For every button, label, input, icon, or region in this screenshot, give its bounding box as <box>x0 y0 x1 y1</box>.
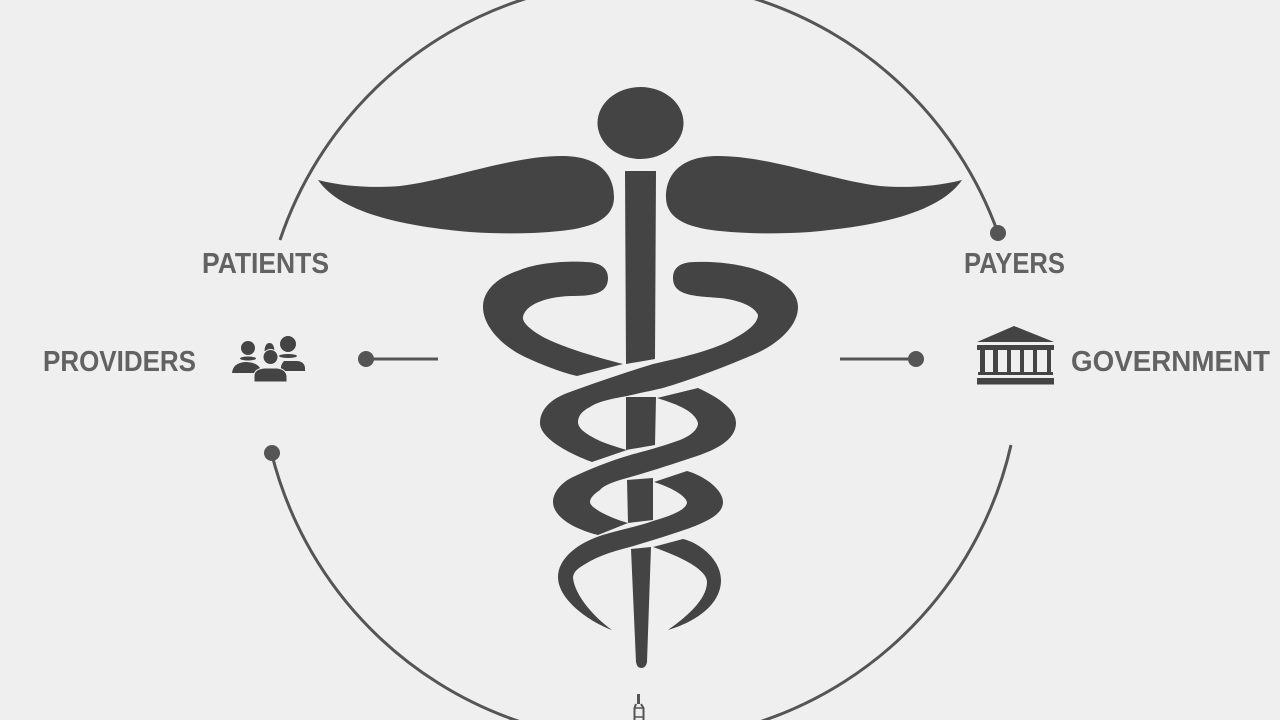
connector: government <box>840 351 924 367</box>
connector: providers <box>358 351 438 367</box>
ring arc: top right with dot <box>749 0 1006 241</box>
label: patients: PATIENTS <box>202 248 329 280</box>
lower serpent band <box>558 471 723 630</box>
ring arc: top left <box>280 0 531 240</box>
icon: government building <box>977 326 1054 384</box>
right wing <box>666 156 962 233</box>
staff <box>625 171 656 668</box>
label: government: GOVERNMENT <box>1071 346 1271 378</box>
left wing <box>318 156 614 233</box>
upper right serpent band <box>540 262 798 462</box>
ring arc: bottom right <box>756 445 1011 720</box>
icon: group of people <box>232 336 305 382</box>
icon: syringe <box>634 694 644 720</box>
lower right serpent tail <box>653 539 721 630</box>
label: payers: PAYERS <box>964 248 1065 280</box>
label: providers: PROVIDERS <box>43 346 196 378</box>
ring arc: bottom left with dot <box>264 445 524 720</box>
upper left serpent <box>483 262 623 376</box>
caduceus symbol <box>318 87 962 668</box>
caduceus orb <box>598 87 684 159</box>
middle serpent band <box>553 388 736 535</box>
